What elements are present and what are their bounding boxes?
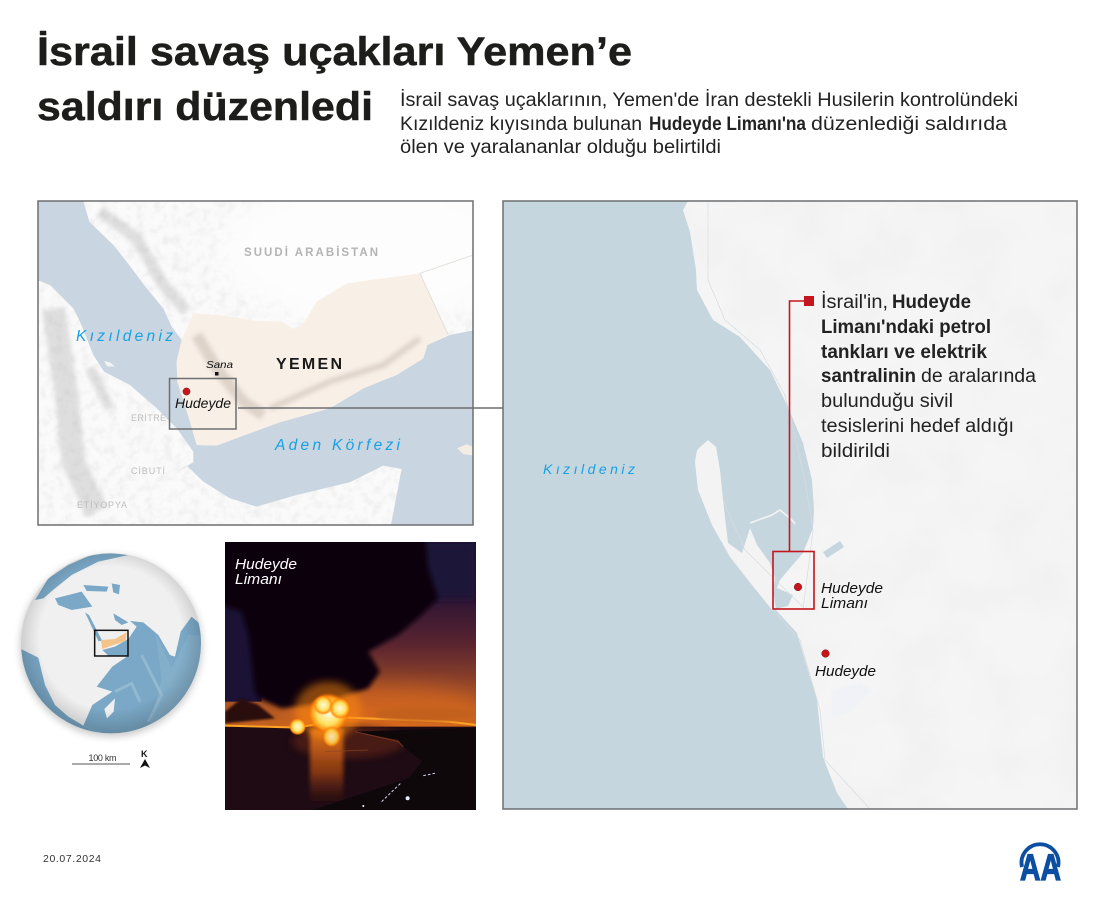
callout text: bulunduğu sivil	[821, 391, 953, 412]
north arrow	[140, 749, 150, 768]
Yemen	[177, 255, 473, 446]
terrain texture	[40, 202, 471, 524]
sea	[503, 201, 848, 809]
salt flat	[832, 683, 873, 718]
callout leader line	[790, 301, 804, 551]
island: Socotra	[458, 444, 472, 456]
globe inset rectangle	[95, 630, 128, 656]
scale bar	[72, 753, 130, 764]
dark shore	[308, 728, 477, 812]
title	[37, 30, 632, 129]
inset rectangle	[170, 378, 236, 429]
label: Yemen: YEMEN	[276, 356, 342, 373]
spit and lagoon land	[695, 440, 776, 611]
callout text: de aralarında	[921, 366, 1036, 387]
photo caption	[235, 557, 297, 588]
label: Hudeyde Limanı: Hudeyde	[821, 581, 883, 597]
intro text: İsrail savaş uçaklarının, Yemen'de İran destekli Husilerin kontrolündeki	[400, 90, 1018, 111]
port highlight rectangle	[773, 552, 814, 609]
Red Sea islands	[104, 361, 115, 367]
intro text: Hudeyde Limanı'na	[649, 114, 806, 135]
photo caption: Hudeyde	[235, 557, 297, 573]
sky	[225, 542, 477, 728]
frame: regional map	[38, 201, 473, 525]
marker: Hudeyde Limanı	[794, 583, 802, 591]
fireball	[295, 682, 362, 738]
intro text: Kızıldeniz kıyısında bulunan	[400, 114, 642, 135]
sea	[37, 201, 475, 527]
callout text: Limanı'ndaki petrol	[821, 317, 991, 338]
Yemen highlight	[101, 632, 127, 649]
callout marker	[804, 296, 814, 306]
callout text	[821, 292, 1036, 462]
panel: detail map of Hudeyde coast	[503, 201, 1077, 809]
labels: neighbouring countries: ERİTRE	[131, 413, 166, 423]
intro text: düzenlediği saldırıda	[811, 114, 1007, 135]
scale bar: 100 km	[88, 753, 116, 763]
water	[225, 727, 477, 812]
marker: Sana	[215, 372, 218, 376]
connector line between maps	[238, 407, 503, 409]
panel: regional map of Yemen	[38, 202, 472, 524]
marker: Hudeyde	[183, 388, 190, 395]
intro text	[400, 90, 1018, 158]
Madagascar	[104, 698, 115, 718]
smoke	[215, 535, 438, 708]
coastal road lines	[708, 202, 870, 809]
labels: neighbouring countries: ETİYOPYA	[77, 500, 127, 510]
label: Sana: Sana	[206, 359, 233, 371]
logo: AA: AA	[1020, 847, 1061, 888]
callout text: bildirildi	[821, 441, 890, 462]
label: Hudeyde Limanı	[822, 582, 882, 608]
callout text: Hudeyde	[892, 292, 971, 313]
photo: fire at Hudeyde port	[225, 542, 476, 810]
label: Aden Körfezi: Aden Körfezi	[274, 437, 401, 454]
title: İsrail savaş uçakları Yemen’e	[37, 30, 632, 74]
locator globe	[18, 552, 205, 738]
label: Hudeyde: Hudeyde	[175, 395, 231, 411]
labels: neighbouring countries	[77, 413, 166, 510]
callout text: tankları ve elektrik	[821, 342, 987, 363]
shore lights	[382, 773, 437, 802]
label: Kızıldeniz: Kızıldeniz	[76, 328, 173, 345]
marker: Hudeyde	[822, 650, 829, 657]
frame: detail map	[503, 201, 1077, 809]
lake	[823, 541, 844, 558]
callout text: santralinin	[821, 366, 916, 387]
land texture	[680, 201, 1077, 809]
label: Suudi Arabistan: SUUDİ ARABİSTAN	[244, 246, 378, 259]
title: saldırı düzenledi	[37, 85, 373, 129]
label: Hudeyde: Hudeyde	[815, 664, 876, 680]
callout text: tesislerini hedef aldığı	[821, 416, 1014, 437]
callout text: İsrail'in,	[821, 292, 888, 313]
label: Kızıldeniz: Kızıldeniz	[543, 461, 635, 477]
far shore lights	[225, 718, 477, 728]
north arrow: K	[141, 749, 148, 759]
intro text: ölen ve yaralananlar olduğu belirtildi	[400, 137, 721, 158]
labels: neighbouring countries: CİBUTİ	[131, 466, 165, 476]
label: Hudeyde Limanı: Limanı	[821, 596, 868, 612]
photo caption: Limanı	[235, 572, 282, 588]
date: 20.07.2024	[43, 853, 101, 865]
globe seas	[18, 552, 205, 738]
